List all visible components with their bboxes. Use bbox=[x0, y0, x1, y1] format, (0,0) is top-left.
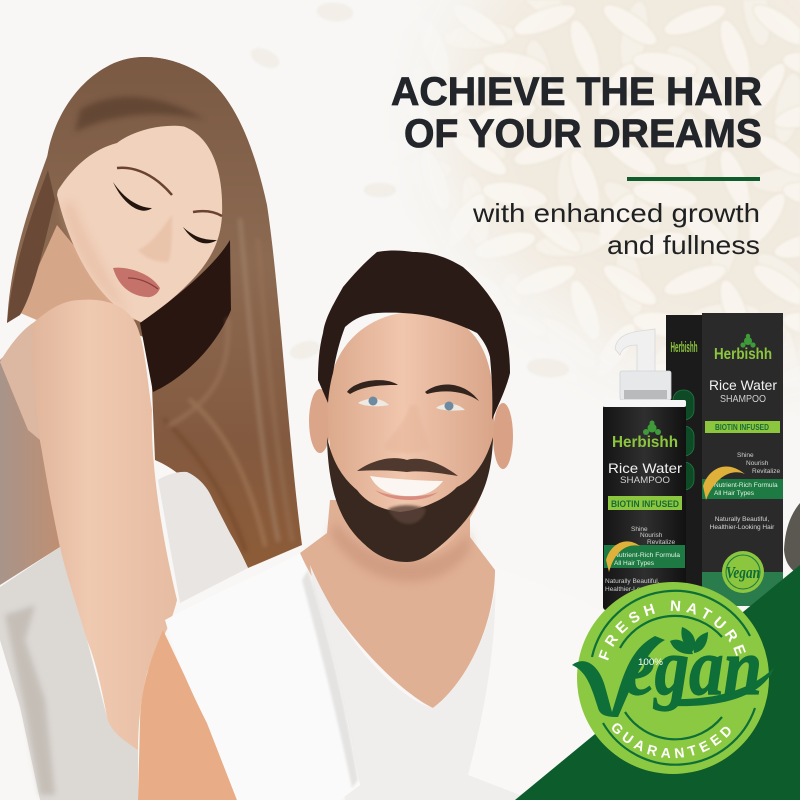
shoulder and arm bbox=[0, 300, 177, 750]
bottle rice icon bbox=[606, 541, 640, 572]
badge swoosh bbox=[672, 668, 774, 706]
towel right bbox=[468, 567, 600, 795]
hair bbox=[318, 250, 510, 420]
bottle subtitle: SHAMPOO bbox=[620, 475, 670, 485]
bottle green band: All Hair Types bbox=[614, 560, 655, 567]
bottle green band: Nutrient-Rich Formula bbox=[614, 552, 680, 559]
box side icons bbox=[673, 390, 694, 490]
bottle claims bbox=[631, 526, 676, 546]
mouth and moustache bbox=[357, 458, 458, 500]
headline bbox=[391, 70, 762, 156]
bottle green band bbox=[604, 545, 685, 568]
pump bbox=[615, 329, 655, 372]
badge rings bbox=[592, 591, 755, 765]
neck and chest bbox=[300, 500, 495, 708]
accent rule bbox=[627, 177, 760, 181]
headline: OF YOUR DREAMS bbox=[404, 112, 762, 156]
bottle brand: Herbishh bbox=[612, 434, 678, 451]
box claims: Revitalize bbox=[752, 468, 781, 475]
rock behind box bbox=[784, 503, 800, 575]
box green band bbox=[702, 479, 783, 499]
bottle claims: Nourish bbox=[640, 532, 663, 539]
badge bottom text: GUARANTEED bbox=[612, 723, 731, 758]
woman face details bbox=[113, 168, 222, 297]
box brand: Herbishh bbox=[714, 346, 772, 363]
upper towel bbox=[158, 472, 248, 603]
face bbox=[328, 312, 494, 560]
box front bbox=[702, 313, 783, 575]
dark hair shadow bbox=[140, 240, 231, 392]
badge script word: egan bbox=[624, 624, 762, 712]
subheading bbox=[472, 198, 760, 260]
box side bbox=[666, 315, 702, 600]
box tree icon bbox=[740, 334, 756, 348]
nose bbox=[384, 405, 430, 453]
hair strands bbox=[165, 220, 292, 550]
bottle biotin bar: BIOTIN INFUSED bbox=[611, 499, 679, 509]
rice background bbox=[252, 0, 800, 377]
product box bbox=[666, 313, 783, 606]
woman bbox=[0, 57, 302, 800]
cap bbox=[620, 371, 671, 400]
bottle body bbox=[603, 405, 686, 610]
bottle tagline bbox=[605, 578, 671, 593]
badge disc bbox=[577, 582, 769, 774]
beard bbox=[327, 437, 493, 562]
bare back bbox=[0, 340, 60, 585]
bottle tagline: Naturally Beautiful, bbox=[605, 578, 660, 585]
eyes and brows bbox=[347, 380, 479, 411]
box biotin bar: BIOTIN INFUSED bbox=[715, 423, 769, 432]
badge script V bbox=[572, 636, 665, 717]
face bbox=[57, 123, 222, 323]
box subtitle: SHAMPOO bbox=[720, 394, 766, 405]
box vegan seal: Vegan bbox=[726, 563, 760, 582]
box claims bbox=[737, 452, 781, 475]
ears bbox=[309, 389, 331, 453]
left arm bbox=[138, 630, 237, 800]
subheading: with enhanced growth bbox=[472, 198, 760, 228]
box tagline bbox=[710, 516, 775, 531]
box green band: Nutrient-Rich Formula bbox=[714, 482, 778, 489]
box claims: Nourish bbox=[746, 460, 769, 467]
box tagline: Naturally Beautiful, bbox=[715, 516, 769, 523]
bottle tagline: Healthier-Looking Hair bbox=[605, 586, 671, 593]
box title: Rice Water bbox=[709, 377, 777, 393]
tank top bbox=[310, 565, 540, 800]
badge top text: FRESH NATURE bbox=[598, 600, 746, 660]
lower towel bbox=[0, 547, 138, 800]
box claims: Shine bbox=[737, 452, 754, 459]
man bbox=[138, 250, 600, 800]
bottle claims: Revitalize bbox=[647, 539, 676, 546]
box green band: All Hair Types bbox=[714, 490, 755, 497]
neck bbox=[18, 225, 135, 330]
product box: Herbishh bbox=[670, 339, 698, 356]
product bottle bbox=[603, 329, 686, 610]
vegan badge bbox=[572, 582, 774, 774]
badge percent: 100% bbox=[638, 657, 663, 667]
headline: ACHIEVE THE HAIR bbox=[391, 70, 762, 114]
green corner bbox=[515, 565, 800, 800]
bottle biotin bar bbox=[608, 496, 682, 510]
box vegan seal bbox=[722, 551, 764, 593]
towel left bbox=[165, 553, 360, 800]
bottle tree icon bbox=[643, 420, 661, 435]
hair front bbox=[47, 57, 274, 300]
box rice icon bbox=[703, 466, 745, 500]
bottle claims: Shine bbox=[631, 526, 648, 533]
hair mass bbox=[7, 57, 302, 568]
bottle title: Rice Water bbox=[608, 460, 682, 476]
subheading: and fullness bbox=[607, 230, 760, 260]
box biotin bar bbox=[705, 421, 780, 433]
icon: leaves bbox=[670, 627, 708, 654]
box tagline: Healthier-Looking Hair bbox=[710, 524, 775, 531]
